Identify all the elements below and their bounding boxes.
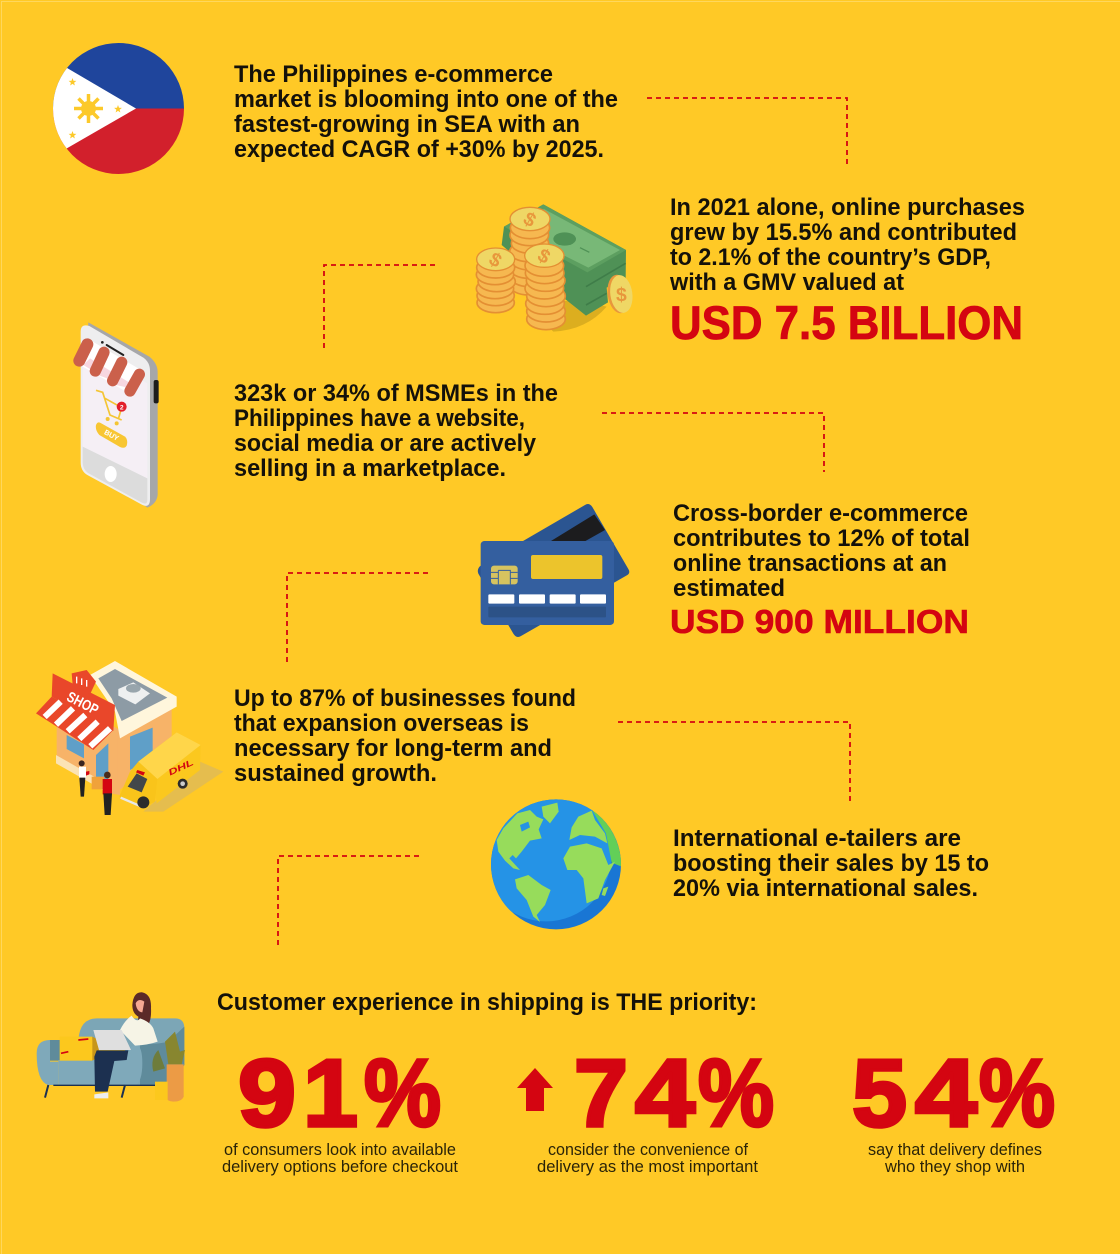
text: e-tailers: International e-tailers are (673, 825, 961, 852)
connector 1 (647, 98, 847, 168)
shop sign (52, 670, 115, 731)
text: e-tailers: boosting their sales by 15 to (673, 850, 989, 877)
stat: 74% with up arrow: consider the convenience of (548, 1140, 748, 1159)
text: cross-border: Cross-border e-commerce (673, 500, 968, 527)
buy button: BUY (103, 428, 121, 443)
icon: up arrow (517, 1068, 553, 1111)
icon: shopping cart (96, 390, 127, 425)
text: Philippines market growth: The Philippines e-commerce (234, 61, 553, 88)
text: Philippines market growth: fastest-growing in SEA with an (234, 111, 580, 138)
stat: 54%: 5 (852, 1040, 907, 1147)
text: expansion overseas: sustained growth. (234, 760, 437, 787)
text: expansion overseas (234, 685, 576, 787)
buy button (96, 422, 127, 448)
text: MSMEs: selling in a marketplace. (234, 455, 506, 482)
stat: 74% with up arrow: % (698, 1040, 774, 1147)
awning (36, 697, 113, 750)
stat: 74% with up arrow: delivery as the most important (537, 1157, 758, 1176)
icon: money and coins: $ (616, 285, 627, 306)
text: Philippines market growth: expected CAGR of +30% by 2025. (234, 136, 604, 163)
text: cross-border: contributes to 12% of total (673, 525, 970, 552)
stat: 54%: % (979, 1040, 1055, 1147)
text: expansion overseas: that expansion overseas is (234, 710, 529, 737)
stat: 91%: % (364, 1040, 441, 1147)
shop sign: SHOP (64, 689, 101, 719)
text: MSMEs (234, 380, 558, 482)
icon: shopping cart: 2 (120, 404, 124, 411)
delivery van: DHL (167, 757, 195, 777)
text: 2021 online purchases: to 2.1% of the country’s GDP, (670, 244, 991, 271)
stat: 91%: of consumers look into available (224, 1140, 456, 1159)
icon: money and coins: $ (534, 245, 554, 269)
text: 2021 online purchases: grew by 15.5% and contributed (670, 219, 1017, 246)
stat: 91% (222, 1040, 458, 1176)
text: MSMEs: Philippines have a website, (234, 405, 525, 432)
icon: woman on sofa with parcel (37, 992, 185, 1102)
big number: USD 900 million: USD 900 MILLION (670, 603, 969, 640)
text: expansion overseas: Up to 87% of businesses found (234, 685, 576, 712)
woman (93, 992, 158, 1098)
connector 6 (278, 856, 419, 948)
icon: money and coins: $ (519, 209, 539, 232)
text: Philippines market growth (234, 61, 618, 163)
plant (152, 1032, 185, 1102)
icon: shop and DHL van (36, 661, 223, 815)
text: MSMEs: social media or are actively (234, 430, 536, 457)
stat: 54% (852, 1040, 1055, 1176)
heading: customer experience: Customer experience in shipping is THE priority: (217, 989, 757, 1016)
icon: credit cards (478, 504, 629, 637)
connector 2 (324, 265, 435, 349)
big number: USD 7.5 billion: USD 7.5 BILLION (670, 296, 1023, 349)
text: e-tailers: 20% via international sales. (673, 875, 978, 902)
stat: 91%: 1 (303, 1040, 358, 1147)
stat: 74% with up arrow: 4 (635, 1040, 695, 1147)
people (79, 760, 112, 815)
icon: stacked coins back (476, 217, 565, 330)
stat: 54%: 4 (915, 1040, 977, 1147)
stat: 54%: say that delivery defines (868, 1140, 1042, 1159)
stat: 54%: who they shop with (884, 1157, 1025, 1176)
parcel (60, 1037, 99, 1061)
icon: globe (491, 799, 621, 930)
connector 5 (618, 722, 850, 805)
icon: money and coins: $ (485, 249, 505, 273)
text: cross-border: estimated (673, 575, 785, 602)
connector 3 (602, 413, 824, 472)
text: cross-border (673, 500, 970, 602)
stat: 91%: 9 (238, 1040, 296, 1147)
text: expansion overseas: necessary for long-term and (234, 735, 552, 762)
connector 4 (287, 573, 428, 662)
icon: smartphone shop (79, 322, 159, 508)
icon: Philippine flag (53, 43, 184, 174)
stat: 74% with up arrow (517, 1040, 774, 1176)
text: 2021 online purchases: In 2021 alone, online purchases (670, 194, 1025, 221)
icon: awning (79, 339, 145, 395)
delivery van (119, 732, 201, 808)
text: Philippines market growth: market is blooming into one of the (234, 86, 618, 113)
text: MSMEs: 323k or 34% of MSMEs in the (234, 380, 558, 407)
stat: 74% with up arrow: 7 (574, 1040, 628, 1147)
text: 2021 online purchases: with a GMV valued at (669, 269, 904, 296)
stat: 91%: delivery options before checkout (222, 1157, 458, 1176)
text: cross-border: online transactions at an (673, 550, 947, 577)
text: e-tailers (673, 825, 989, 902)
icon: money and coins (476, 204, 635, 332)
text: 2021 online purchases (669, 194, 1025, 296)
